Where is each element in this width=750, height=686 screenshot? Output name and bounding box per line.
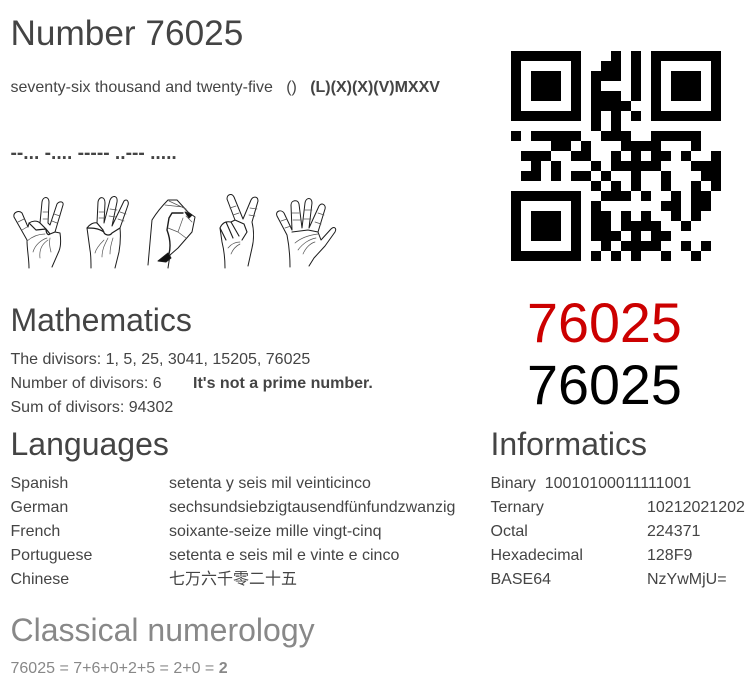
language table: French xyxy=(10,523,60,540)
informatics table: Octal xyxy=(490,523,528,540)
informatics table: 10212021202 xyxy=(647,499,745,516)
heading: languages: Languages xyxy=(10,426,169,462)
informatics table: 224371 xyxy=(647,523,700,540)
language table: German xyxy=(10,499,68,516)
informatics table: 128F9 xyxy=(647,547,692,564)
language table: Portuguese xyxy=(10,547,92,564)
numerology sum: 76025 = 7+6+0+2+5 = 2+0 = 2 xyxy=(10,660,228,677)
informatics table: NzYwMjU= xyxy=(647,571,727,588)
heading: mathematics: Mathematics xyxy=(10,302,192,338)
language table xyxy=(10,475,455,588)
QR code xyxy=(511,51,721,261)
title: Number 76025 xyxy=(10,14,243,53)
language table: Chinese xyxy=(10,571,69,588)
informatics table: BASE64 xyxy=(490,571,551,588)
heading: informatics: Informatics xyxy=(490,426,647,462)
number in red: 76025 xyxy=(527,292,682,354)
number in words and roman numeral: seventy-six thousand and twenty-five () (L)(X)(X)(V)MXXV xyxy=(10,79,440,96)
language table: Spanish xyxy=(10,475,68,492)
language table: setenta e seis mil e vinte e cinco xyxy=(169,547,399,564)
number of divisors and primality: Number of divisors: 6 xyxy=(10,375,162,392)
informatics table: Hexadecimal xyxy=(490,547,583,564)
divisors list: The divisors: 1, 5, 25, 3041, 15205, 76025 xyxy=(10,351,310,368)
icon: sign language hands xyxy=(13,194,336,268)
language table: sechsundsiebzigtausendfünfundzwanzig xyxy=(169,499,455,516)
language table: 七万六千零二十五 xyxy=(169,571,297,588)
language table: setenta y seis mil veinticinco xyxy=(169,475,371,492)
sum of divisors: Sum of divisors: 94302 xyxy=(10,399,173,416)
number of divisors and primality xyxy=(10,375,373,392)
morse code: --... -.... ----- ..--- ..... xyxy=(10,143,177,164)
number in black: 76025 xyxy=(527,354,682,416)
informatics table: Ternary xyxy=(490,499,544,516)
heading: classical numerology: Classical numerology xyxy=(10,612,315,648)
language table: soixante-seize mille vingt-cinq xyxy=(169,523,382,540)
informatics table xyxy=(490,475,745,588)
text: It's not a prime number. xyxy=(193,375,373,392)
informatics table: Binary 10010100011111001 xyxy=(490,475,691,492)
